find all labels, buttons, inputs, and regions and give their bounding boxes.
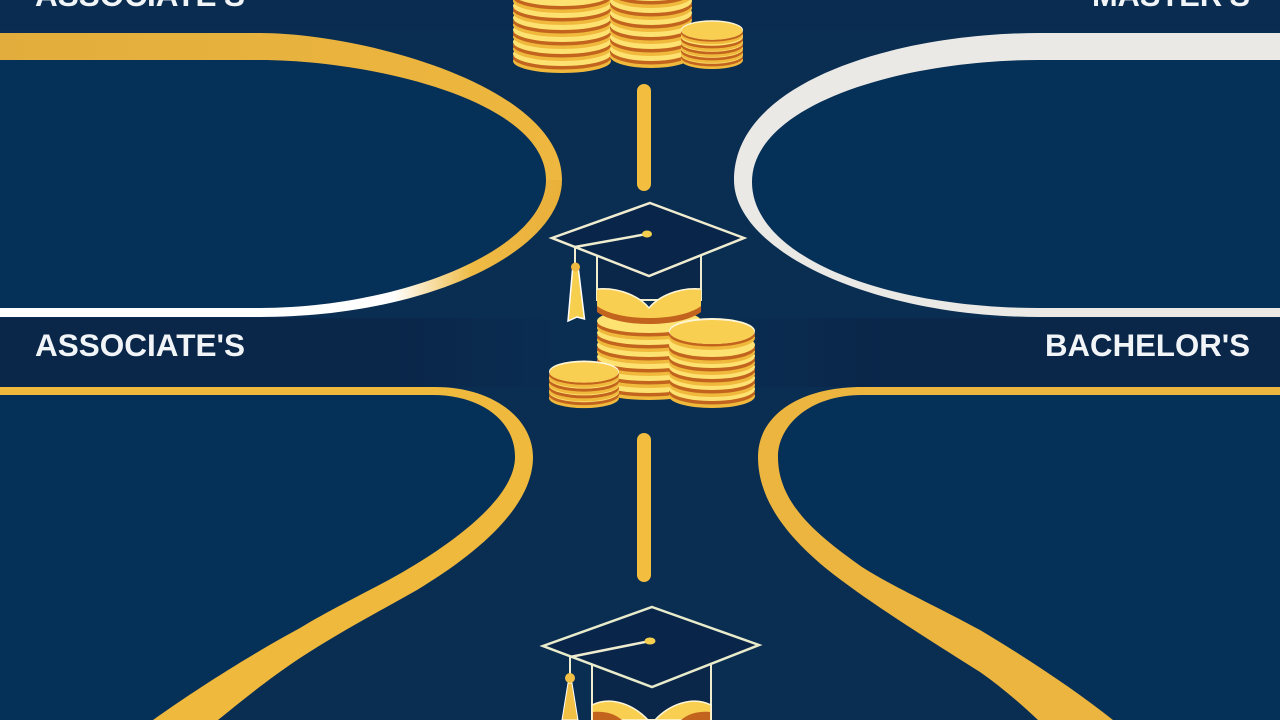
left coin stack: [513, 0, 611, 73]
icon: top coin stacks: [513, 0, 743, 73]
cap cord: [575, 234, 647, 247]
open-book top coin: [592, 701, 711, 720]
icon: graduation cap and coins: [549, 203, 755, 408]
panel outline: gold curve, fading to white: [0, 33, 562, 317]
band: top heading strip: [0, 0, 1280, 30]
panel: lower-left: [0, 387, 533, 720]
connector: lower dash: [637, 433, 651, 582]
panel: top-left associate's: [0, 33, 562, 317]
cap board: [543, 607, 759, 687]
panel outline: white curve: [734, 33, 1280, 317]
panel: top-right master's: [734, 33, 1280, 317]
cap cord: [570, 641, 650, 657]
middle coin stack: [610, 0, 692, 68]
band: middle heading strip: [0, 318, 1280, 387]
panel: lower-right: [758, 387, 1280, 720]
tassel: [562, 683, 578, 720]
open-book top coin: [597, 289, 701, 324]
heading: bachelor's: BACHELOR'S: [1045, 327, 1250, 363]
icon: lower graduation cap: [543, 607, 759, 720]
left coin stack: [549, 361, 619, 408]
right coin stack: [669, 318, 755, 408]
cap skull: [597, 254, 701, 300]
panel outline: gold curve: [0, 387, 533, 720]
heading: associate's: ASSOCIATE'S: [35, 327, 245, 363]
connector: top dash: [637, 84, 651, 191]
cap skull: [592, 660, 711, 720]
panel outline: gold curve: [758, 387, 1280, 720]
tassel: [568, 270, 584, 321]
center coin stack: [597, 309, 701, 400]
cap board: [552, 203, 744, 276]
right coin stack: [681, 20, 743, 69]
